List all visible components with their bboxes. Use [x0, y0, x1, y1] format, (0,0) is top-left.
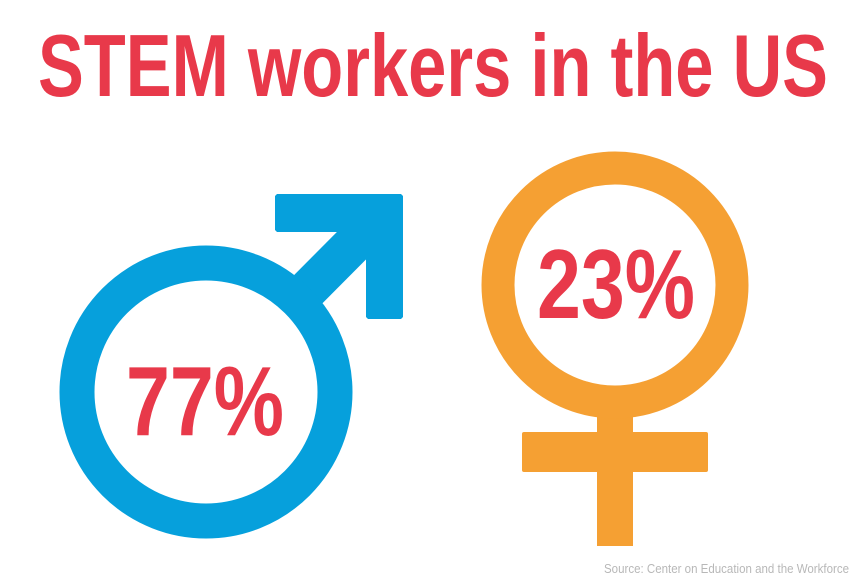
- female percentage: 23%: [537, 229, 695, 339]
- male percentage: 77%: [126, 346, 284, 456]
- icon: male symbol: [60, 194, 403, 538]
- icon: female symbol: [482, 152, 748, 546]
